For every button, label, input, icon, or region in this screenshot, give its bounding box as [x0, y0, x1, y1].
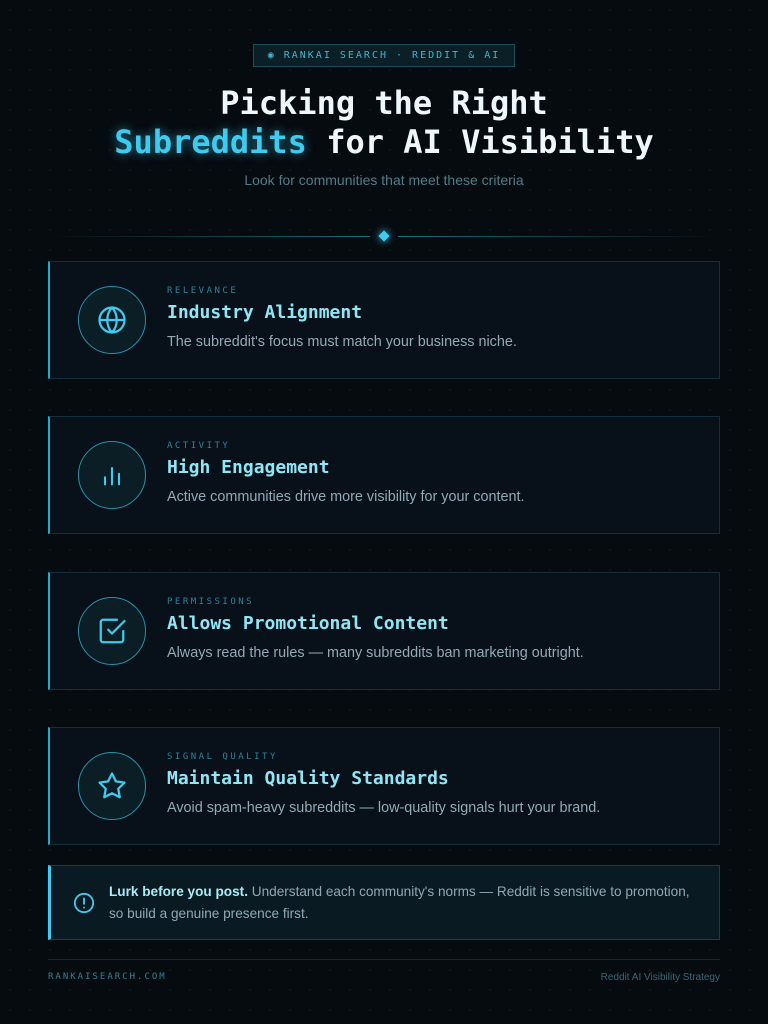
card: activity: ACTIVITY	[167, 441, 230, 451]
callout: Lurk before you post. Understand each community's norms — Reddit is sensitive to promotion,	[109, 884, 690, 899]
icon: bar chart	[78, 441, 146, 509]
footer: RANKAISEARCH.COM	[48, 972, 167, 982]
card: relevance: Industry Alignment	[167, 302, 362, 323]
badge: ◉ RANKAI SEARCH · REDDIT & AI	[268, 50, 500, 61]
title: Subreddits for AI Visibility	[114, 123, 654, 161]
card: signal quality: SIGNAL QUALITY	[167, 752, 278, 762]
card: signal quality: Avoid spam-heavy subreddits — low-quality signals hurt your brand.	[167, 800, 600, 816]
card: activity	[48, 416, 720, 534]
icon: checkbox	[78, 597, 146, 665]
card: activity: Active communities drive more visibility for your content.	[167, 489, 524, 505]
callout	[48, 865, 720, 940]
icon: star	[78, 752, 146, 820]
card: signal quality	[48, 727, 720, 845]
card: permissions: Allows Promotional Content	[167, 613, 449, 634]
card: activity: High Engagement	[167, 457, 330, 478]
card: permissions	[48, 572, 720, 690]
card: permissions: PERMISSIONS	[167, 597, 254, 607]
card: relevance	[48, 261, 720, 379]
card: signal quality: Maintain Quality Standards	[167, 768, 449, 789]
title: Picking the Right	[220, 84, 548, 122]
subtitle: Look for communities that meet these criteria	[244, 172, 524, 188]
footer	[48, 959, 720, 989]
badge	[253, 44, 515, 67]
footer: Reddit AI Visibility Strategy	[601, 972, 720, 983]
divider with diamond	[74, 226, 694, 246]
card: permissions: Always read the rules — many subreddits ban marketing outright.	[167, 645, 584, 661]
card: relevance: The subreddit's focus must match your business niche.	[167, 334, 517, 350]
icon: globe	[78, 286, 146, 354]
title	[110, 84, 654, 161]
callout: so build a genuine presence first.	[109, 906, 308, 921]
card: relevance: RELEVANCE	[167, 286, 238, 296]
icon: alert	[74, 892, 94, 914]
